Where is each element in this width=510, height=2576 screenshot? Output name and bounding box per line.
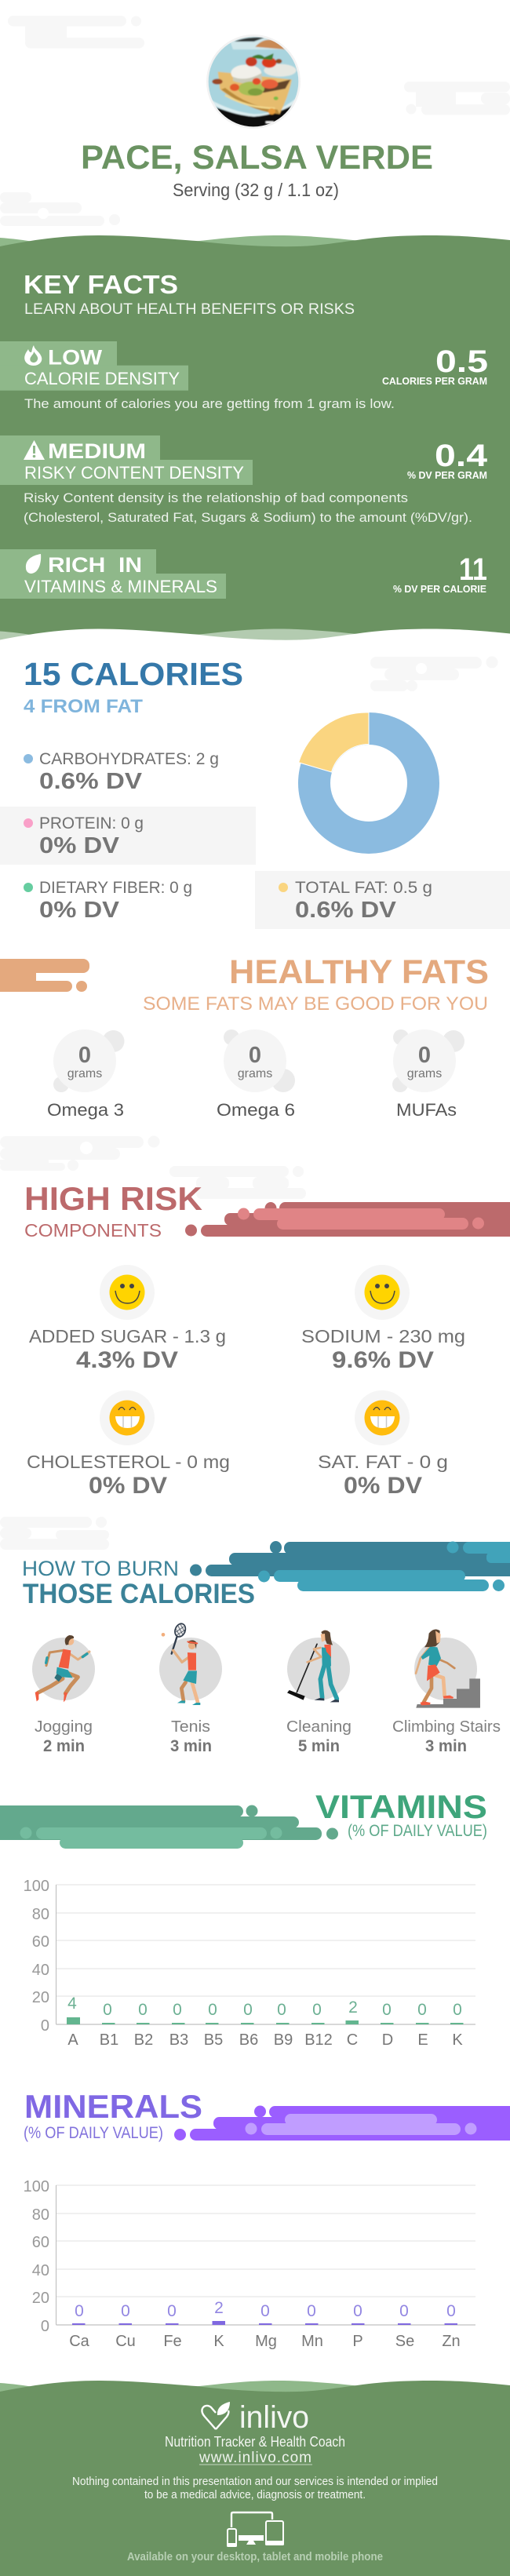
icon: jogger xyxy=(35,1635,89,1702)
subheading: LEARN ABOUT HEALTH BENEFITS OR RISKS xyxy=(24,301,355,318)
bar chart: vitamins: 0 xyxy=(208,2001,217,2019)
food photo xyxy=(206,35,301,129)
stat: carbohydrates: 0.6% DV xyxy=(39,769,143,794)
activity: climbing stairs: 3 min xyxy=(425,1737,467,1755)
logo: inlivo: inlivo xyxy=(239,2400,309,2435)
stat: sodium: 9.6% DV xyxy=(332,1347,434,1373)
bar chart: vitamins: 60 xyxy=(32,1933,49,1951)
stat: sodium: SODIUM - 230 mg xyxy=(301,1326,465,1346)
icon: devices xyxy=(227,2512,284,2547)
icon: warning triangle xyxy=(24,440,45,460)
fact: risky content density: Risky Content density is the relationship of bad components xyxy=(24,490,408,505)
fact: risky content density: % DV PER GRAM xyxy=(407,469,487,481)
icon: grin xyxy=(100,1390,155,1445)
stat: total fat: TOTAL FAT: 0.5 g xyxy=(295,879,432,897)
availability note: Available on your desktop, tablet and mobile phone xyxy=(127,2550,383,2563)
bar chart: vitamins: 20 xyxy=(32,1989,49,2006)
stat: total fat: 0.6% DV xyxy=(295,898,397,923)
disclaimer xyxy=(72,2475,438,2501)
bar chart: vitamins: 0 xyxy=(173,2001,182,2019)
stat: omega 3 xyxy=(47,1029,124,1120)
bar chart: vitamins: 0 xyxy=(277,2001,286,2019)
bar chart: vitamins: C xyxy=(347,2031,358,2049)
activity: tennis xyxy=(159,1622,222,1755)
stat: carbohydrates xyxy=(24,750,219,794)
stat: cholesterol xyxy=(27,1390,230,1499)
activity: jogging: 2 min xyxy=(43,1737,85,1755)
subheading: from fat: 4 FROM FAT xyxy=(24,696,143,717)
fact: rich in vitamins and minerals: 11 xyxy=(459,552,487,587)
fact: calorie density: CALORIES PER GRAM xyxy=(382,375,487,387)
panel: calories xyxy=(0,656,510,929)
fact: rich in vitamins and minerals xyxy=(0,549,487,599)
stat: omega 6 xyxy=(217,1029,295,1120)
bar chart: minerals: Cu xyxy=(115,2333,136,2350)
activity: climbing stairs xyxy=(392,1629,501,1755)
website link: www.inlivo.com xyxy=(199,2450,311,2466)
bar chart: vitamins: B12 xyxy=(304,2031,333,2049)
stat: added sugar: 4.3% DV xyxy=(76,1347,178,1373)
heading: high risk: HIGH RISK xyxy=(24,1180,202,1217)
tagline: Nutrition Tracker & Health Coach xyxy=(165,2433,345,2450)
bar chart: vitamins: B5 xyxy=(204,2031,223,2049)
bar chart: minerals: Se xyxy=(395,2333,414,2350)
stat: mufas xyxy=(392,1029,464,1120)
stat: added sugar xyxy=(29,1265,226,1373)
bar chart: minerals: 0 xyxy=(167,2302,177,2320)
icon: tennis player xyxy=(162,1622,200,1705)
icon: person sweeping xyxy=(287,1630,339,1702)
stat: dietary fiber xyxy=(24,879,192,923)
stat: protein: 0% DV xyxy=(39,833,120,858)
bar chart: minerals: 0 xyxy=(353,2302,362,2320)
bar chart: vitamins: 0 xyxy=(453,2001,462,2019)
disclaimer: to be a medical advice, diagnosis or treatment. xyxy=(144,2488,366,2501)
stat: mufas: 0 xyxy=(418,1043,431,1068)
stat: omega 3: grams xyxy=(67,1067,102,1080)
bar chart: minerals: 60 xyxy=(32,2234,49,2251)
bar chart: vitamins: 0 xyxy=(312,2001,322,2019)
stat: saturated fat: 0% DV xyxy=(344,1473,422,1499)
title: PACE, SALSA VERDE xyxy=(81,139,433,177)
bar chart: minerals: Fe xyxy=(163,2333,182,2350)
bar chart: vitamins: A xyxy=(67,2031,78,2049)
heading: healthy fats: HEALTHY FATS xyxy=(229,953,489,991)
fact: calorie density: LOW xyxy=(48,345,103,369)
activity: tennis: 3 min xyxy=(170,1737,212,1755)
bar chart: vitamins: 4 xyxy=(67,1995,77,2013)
bar chart: vitamins: B1 xyxy=(100,2031,118,2049)
bar chart: minerals: 0 xyxy=(121,2302,130,2320)
heading: vitamins: VITAMINS xyxy=(315,1788,487,1825)
bar chart: minerals: P xyxy=(352,2333,363,2350)
stat: added sugar: ADDED SUGAR - 1.3 g xyxy=(29,1326,226,1346)
panel: high risk components xyxy=(24,1180,510,1499)
stat: saturated fat: SAT. FAT - 0 g xyxy=(318,1452,448,1472)
icon: leaf xyxy=(26,554,41,574)
bar chart: vitamins: B9 xyxy=(274,2031,293,2049)
heading: key facts: KEY FACTS xyxy=(24,271,178,300)
bar chart: vitamins: 2 xyxy=(348,1998,358,2017)
stat: protein xyxy=(0,807,256,865)
bar chart: minerals: Ca xyxy=(69,2333,90,2350)
bar chart: vitamins: E xyxy=(417,2031,428,2049)
bar chart: vitamins xyxy=(24,1878,475,2049)
stat: saturated fat xyxy=(318,1390,448,1499)
bar chart: vitamins: 0 xyxy=(417,2001,427,2019)
bar chart: vitamins: 0 xyxy=(41,2017,49,2035)
bar chart: minerals: 20 xyxy=(32,2290,49,2307)
fact: calorie density: CALORIE DENSITY xyxy=(24,369,180,388)
stat: total fat xyxy=(255,871,510,929)
heading: calories: 15 CALORIES xyxy=(24,656,243,692)
bar chart: minerals: 0 xyxy=(260,2302,270,2320)
fact: risky content density xyxy=(0,435,488,525)
stat: sodium xyxy=(301,1265,465,1373)
stat: mufas: MUFAs xyxy=(396,1100,457,1120)
bar chart: vitamins: 0 xyxy=(138,2001,148,2019)
bar chart: vitamins: 0 xyxy=(103,2001,112,2019)
bar chart: vitamins: B2 xyxy=(134,2031,153,2049)
activity: cleaning: Cleaning xyxy=(286,1718,352,1736)
fact: risky content density: MEDIUM xyxy=(48,439,146,463)
disclaimer: Nothing contained in this presentation and our services is intended or implied xyxy=(72,2475,438,2488)
icon: grin xyxy=(355,1390,410,1445)
icon: smiley xyxy=(100,1265,155,1320)
activity: jogging: Jogging xyxy=(35,1718,93,1736)
bar chart: minerals: 40 xyxy=(32,2262,49,2279)
fact: calorie density: The amount of calories you are getting from 1 gram is low. xyxy=(24,396,395,411)
fact: calorie density: 0.5 xyxy=(435,344,488,379)
icon: smiley xyxy=(355,1265,410,1320)
bar chart: minerals: 0 xyxy=(75,2302,84,2320)
stat: mufas: grams xyxy=(407,1067,442,1080)
fact: rich in vitamins and minerals: VITAMINS & MINERALS xyxy=(24,577,217,596)
subheading: (% OF DAILY VALUE) xyxy=(348,1822,487,1840)
bar chart: minerals: 0 xyxy=(446,2302,456,2320)
bar chart: vitamins: 0 xyxy=(243,2001,253,2019)
panel: minerals xyxy=(24,2088,510,2350)
stat: omega 6: grams xyxy=(238,1067,272,1080)
panel: key facts xyxy=(0,235,510,647)
bar chart: minerals xyxy=(24,2178,475,2350)
bar chart: minerals: 0 xyxy=(41,2318,49,2335)
bar chart: minerals: K xyxy=(213,2333,224,2350)
heading: minerals: MINERALS xyxy=(24,2088,202,2125)
icon: person climbing stairs xyxy=(416,1629,480,1708)
bar chart: minerals: Mg xyxy=(255,2333,277,2350)
bar chart: minerals: Mn xyxy=(301,2333,323,2350)
logo: inlivo xyxy=(202,2400,309,2435)
panel: footer xyxy=(0,2381,510,2576)
fact: rich in vitamins and minerals: RICH IN xyxy=(48,553,142,577)
bar chart: minerals: 2 xyxy=(214,2299,224,2317)
stat: protein: PROTEIN: 0 g xyxy=(39,814,144,833)
bar chart: vitamins: 80 xyxy=(32,1906,49,1923)
stat: carbohydrates: CARBOHYDRATES: 2 g xyxy=(39,750,219,768)
icon: flame xyxy=(24,345,42,366)
bar chart: vitamins: B6 xyxy=(239,2031,258,2049)
bar chart: vitamins: 100 xyxy=(24,1878,49,1895)
serving size: Serving (32 g / 1.1 oz) xyxy=(173,180,339,200)
donut chart xyxy=(299,712,424,838)
panel: healthy fats xyxy=(0,953,489,1120)
bar chart: minerals: 0 xyxy=(399,2302,409,2320)
heading: those calories: THOSE CALORIES xyxy=(23,1579,255,1609)
bar chart: vitamins: D xyxy=(382,2031,393,2049)
bar chart: minerals: 100 xyxy=(24,2178,49,2195)
subheading: (% OF DAILY VALUE) xyxy=(24,2124,163,2142)
fact: risky content density: 0.4 xyxy=(435,439,488,473)
activity: tennis: Tenis xyxy=(171,1718,210,1736)
stat: omega 6: Omega 6 xyxy=(217,1100,295,1120)
fact: risky content density: RISKY CONTENT DENSITY xyxy=(24,463,244,483)
activity: cleaning: 5 min xyxy=(298,1737,340,1755)
stat: omega 3: 0 xyxy=(78,1043,91,1068)
stat: dietary fiber: DIETARY FIBER: 0 g xyxy=(39,879,192,897)
stat: omega 6: 0 xyxy=(249,1043,261,1068)
stat: cholesterol: CHOLESTEROL - 0 mg xyxy=(27,1452,230,1472)
subheading: SOME FATS MAY BE GOOD FOR YOU xyxy=(143,993,488,1015)
bar chart: minerals: 0 xyxy=(307,2302,316,2320)
bar chart: minerals: Zn xyxy=(442,2333,461,2350)
bar chart: vitamins: K xyxy=(452,2031,463,2049)
activity: climbing stairs: Climbing Stairs xyxy=(392,1718,501,1736)
activity: cleaning xyxy=(286,1630,352,1755)
bar chart: vitamins: B3 xyxy=(169,2031,188,2049)
subheading: components: COMPONENTS xyxy=(24,1220,162,1241)
bar chart: minerals: 80 xyxy=(32,2206,49,2224)
stat: cholesterol: 0% DV xyxy=(89,1473,167,1499)
bar chart: vitamins: 0 xyxy=(382,2001,392,2019)
heading: how to burn: HOW TO BURN xyxy=(22,1557,179,1580)
stat: omega 3: Omega 3 xyxy=(47,1100,124,1120)
activity: jogging xyxy=(32,1635,95,1755)
fact: rich in vitamins and minerals: % DV PER CALORIE xyxy=(393,583,486,595)
panel: vitamins xyxy=(0,1788,487,2049)
fact: risky content density: (Cholesterol, Saturated Fat, Sugars & Sodium) to the amount (%DV/gr). xyxy=(24,510,472,525)
fact: calorie density xyxy=(0,341,488,411)
bar chart: vitamins: 40 xyxy=(32,1962,49,1979)
stat: dietary fiber: 0% DV xyxy=(39,898,120,923)
panel: how to burn those calories xyxy=(22,1541,510,1755)
